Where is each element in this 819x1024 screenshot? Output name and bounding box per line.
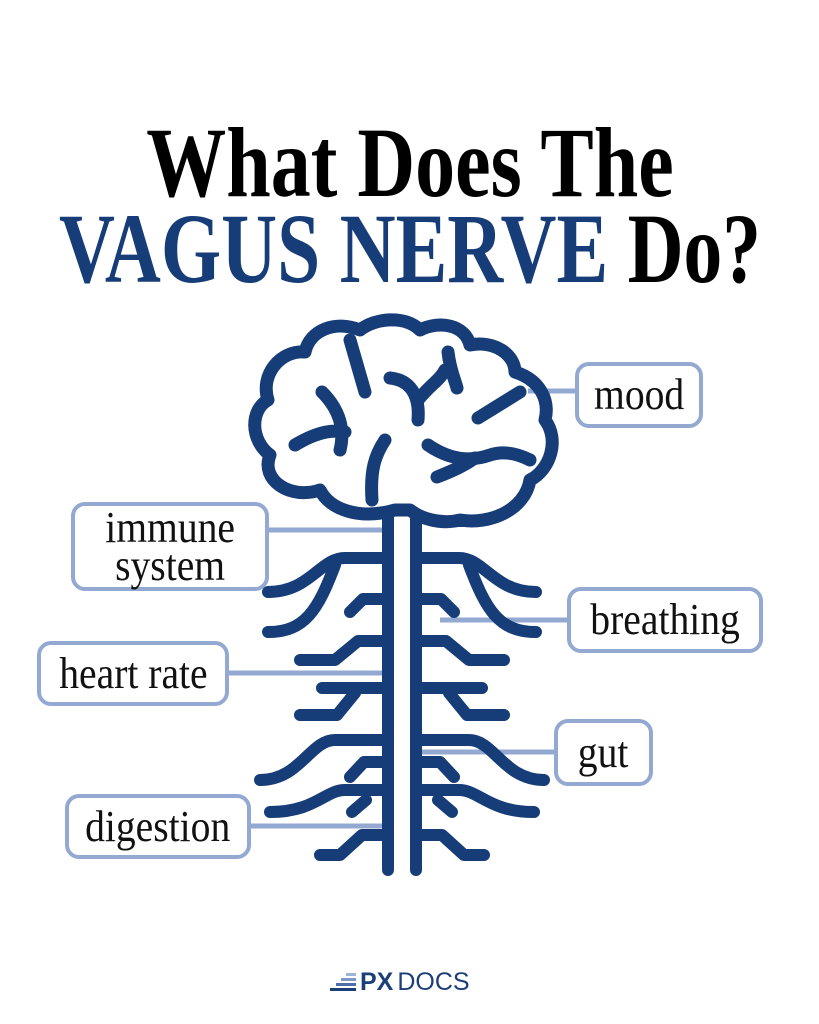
label: immune system: immune [105, 502, 235, 552]
connector lines [226, 391, 577, 826]
label: mood [575, 362, 703, 428]
label: mood: mood [594, 370, 684, 419]
title line 1: What Does The [146, 107, 674, 218]
title line 2: VAGUS NERVE Do? [59, 193, 761, 304]
logo: DOCS [397, 968, 470, 996]
nerve branches [260, 558, 385, 855]
label: gut [554, 719, 653, 786]
label: heart rate: heart rate [59, 648, 207, 698]
logo: PX [360, 968, 393, 996]
label: immune system: system [115, 540, 225, 590]
label: breathing [567, 587, 763, 653]
label: breathing: breathing [590, 595, 740, 644]
label: heart rate [37, 641, 229, 706]
spinal cord [388, 517, 416, 870]
logo [330, 968, 470, 996]
label: digestion: digestion [85, 802, 231, 850]
label: immune system [71, 502, 269, 591]
label: gut: gut [578, 728, 629, 776]
logo icon [330, 973, 356, 991]
label: digestion [65, 794, 251, 859]
brain [255, 320, 552, 522]
